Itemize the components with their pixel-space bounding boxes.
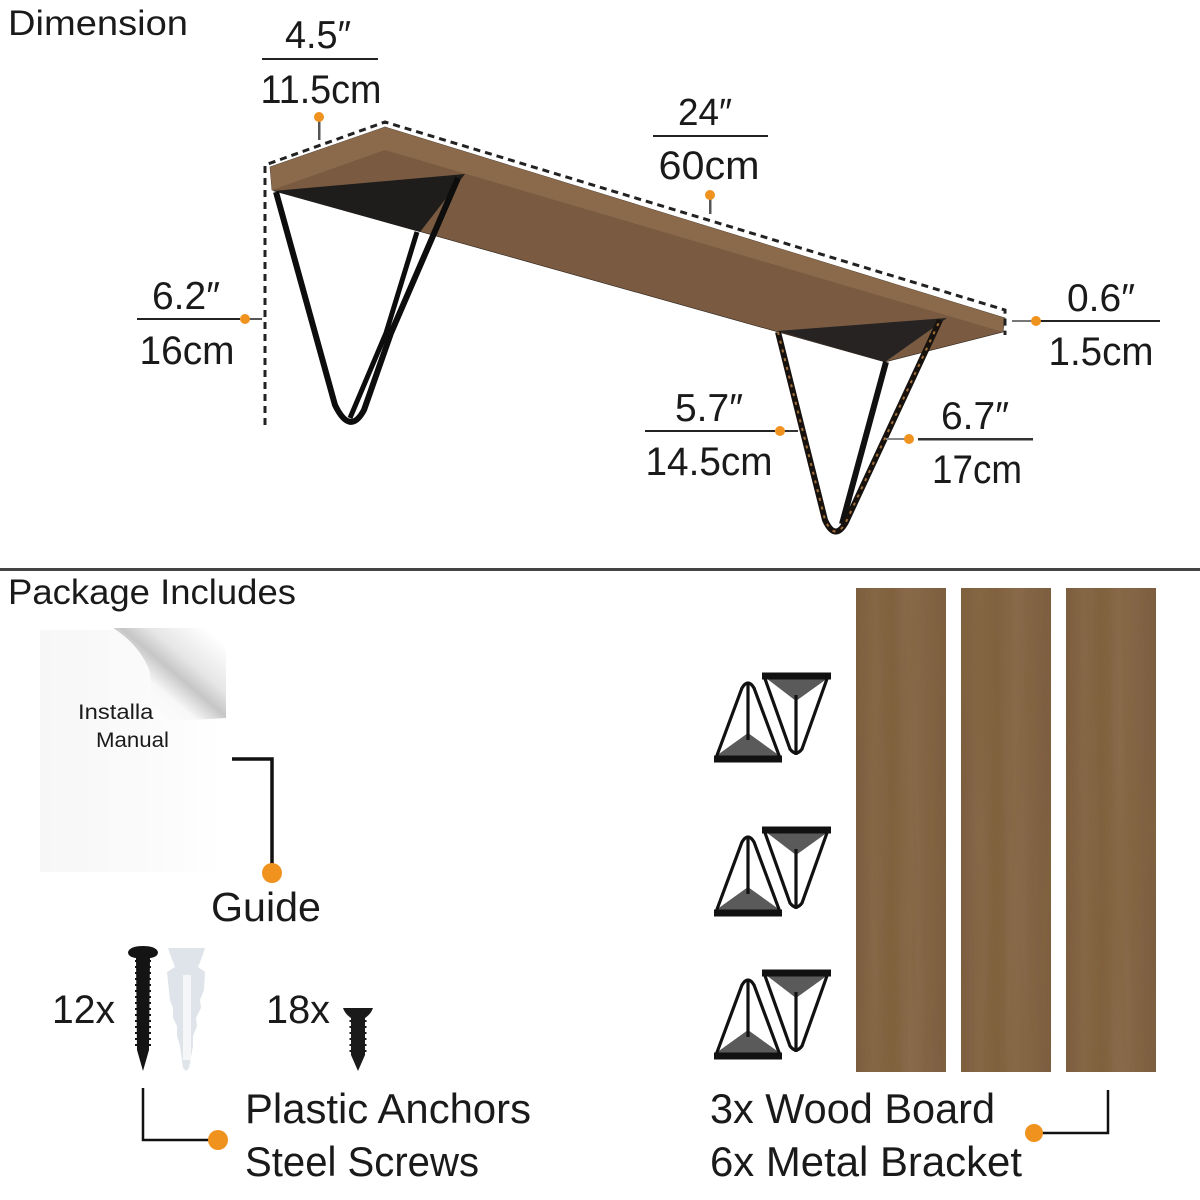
wood board 2	[961, 588, 1051, 1072]
installation manual: Manual	[96, 729, 169, 752]
wood board 3	[1066, 588, 1156, 1072]
downward bracket	[762, 676, 831, 755]
guide connector	[232, 759, 272, 873]
dimension: depth 4.5 in	[260, 14, 382, 140]
shelf diagram	[265, 122, 1005, 532]
dimension: thickness 0.6 in	[1012, 277, 1160, 374]
dashed outline	[265, 122, 1005, 425]
label: Guide: Guide	[211, 884, 321, 930]
boards connector	[1040, 1090, 1108, 1133]
label: boards and brackets: 6x Metal Bracket	[710, 1138, 1022, 1185]
dimension: bracket width 5.7 in: 5.7″	[675, 387, 743, 430]
dimension: bracket height 6.7 in: 17cm	[932, 448, 1022, 492]
dimension: depth 4.5 in: 11.5cm	[260, 68, 382, 112]
upward bracket	[714, 979, 782, 1056]
dimension: thickness 0.6 in: 0.6″	[1067, 277, 1135, 320]
downward bracket	[762, 973, 831, 1052]
right bracket	[777, 318, 947, 532]
downward bracket	[762, 830, 831, 909]
dimension: height 6.2 in: 16cm	[140, 329, 234, 373]
heading: Package Includes: Package Includes	[8, 573, 296, 612]
icon: plastic anchor	[167, 948, 205, 1071]
anchors dot	[208, 1130, 228, 1150]
dimension: length 24 in: 24″	[678, 92, 732, 134]
dimension: height 6.2 in: 6.2″	[152, 275, 220, 318]
dimension: bracket width 5.7 in: 14.5cm	[646, 440, 772, 484]
left bracket	[273, 174, 465, 422]
icon: short screw	[343, 1008, 373, 1071]
upward bracket	[714, 682, 782, 759]
label: boards and brackets	[710, 1085, 1022, 1185]
dimension: thickness 0.6 in: 1.5cm	[1048, 330, 1154, 374]
heading: Dimension: Dimension	[8, 4, 188, 43]
installation manual: Installat	[78, 701, 160, 724]
dimension: length 24 in	[653, 92, 768, 214]
label: anchors and screws	[245, 1085, 531, 1185]
installation manual	[40, 628, 226, 872]
upward bracket	[714, 836, 782, 913]
dimension: bracket height 6.7 in: 6.7″	[941, 395, 1009, 438]
label: boards and brackets: 3x Wood Board	[710, 1085, 995, 1132]
label: anchors and screws: Plastic Anchors	[245, 1085, 531, 1132]
dimension: bracket height 6.7 in	[886, 395, 1033, 492]
dimension: bracket width 5.7 in	[645, 387, 798, 484]
label: 12x: 12x	[52, 988, 115, 1032]
label: anchors and screws: Steel Screws	[245, 1138, 479, 1185]
metal brackets set 1	[714, 676, 831, 759]
dimension: depth 4.5 in: 4.5″	[285, 14, 351, 57]
icon: long screw	[128, 946, 158, 1071]
metal brackets set 3	[714, 973, 831, 1056]
metal brackets set 2	[714, 830, 831, 913]
wood board 1	[856, 588, 946, 1072]
guide dot	[262, 863, 282, 883]
boards dot	[1025, 1124, 1043, 1142]
shelf board	[270, 127, 1005, 362]
dimension: length 24 in: 60cm	[658, 144, 760, 188]
dimension: height 6.2 in	[137, 275, 262, 373]
anchors connector	[143, 1088, 210, 1140]
label: 18x: 18x	[266, 988, 330, 1032]
